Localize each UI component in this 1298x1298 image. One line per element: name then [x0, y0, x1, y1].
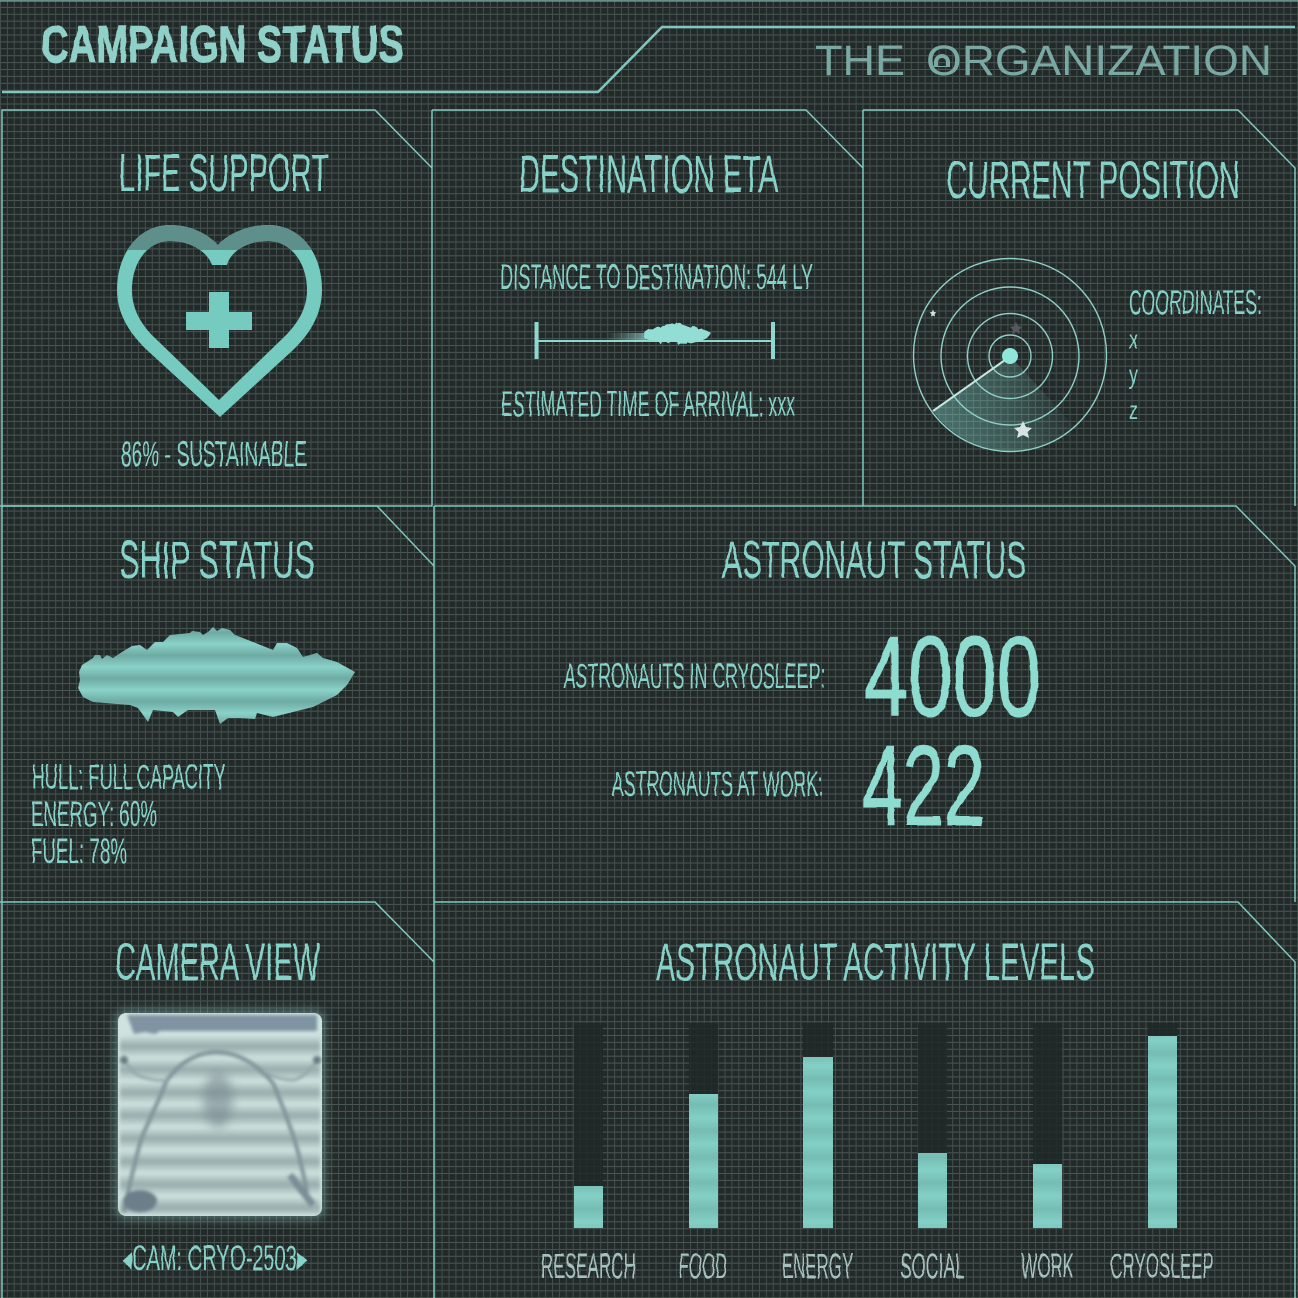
logo: the organization: THE — [815, 37, 905, 85]
bar chart — [574, 1023, 1177, 1228]
ship stats: FUEL: 78% — [31, 832, 127, 871]
panel: camera view — [0, 902, 434, 1298]
bar labels: SOCIAL — [900, 1247, 965, 1286]
coordinates — [1129, 284, 1262, 425]
bar labels — [541, 1247, 1214, 1286]
title: CAMPAIGN STATUS — [41, 16, 404, 74]
ship stats — [31, 758, 226, 871]
stat: cryosleep value: 4000 — [864, 614, 1041, 741]
panel: destination eta — [432, 110, 863, 506]
panel: life support — [2, 110, 432, 506]
camera label: ◂CAM: CRYO-2503▸ — [122, 1239, 307, 1278]
coordinates: z — [1129, 395, 1138, 425]
bar labels: RESEARCH — [541, 1247, 636, 1286]
heading: destination eta: DESTINATION ETA — [519, 145, 778, 204]
panel: astronaut status — [434, 506, 1295, 902]
bar labels: FOOD — [679, 1247, 727, 1286]
heading: camera view: CAMERA VIEW — [115, 933, 320, 992]
camera image — [115, 1010, 325, 1219]
panel: ship status — [0, 506, 434, 902]
radar — [914, 258, 1106, 452]
arrival text: ESTIMATED TIME OF ARRIVAL: xxx — [501, 385, 795, 424]
stat: work label: ASTRONAUTS AT WORK: — [612, 765, 823, 804]
coordinates: y — [1129, 359, 1138, 389]
stat: work value: 422 — [862, 723, 985, 850]
logo: the organization: ORGANIZATION — [926, 37, 1272, 85]
bar labels: WORK — [1021, 1247, 1074, 1286]
progress track with ship — [534, 322, 775, 359]
distance text: DISTANCE TO DESTINATION: 544 LY — [500, 258, 813, 297]
status text: 86% - SUSTAINABLE — [121, 435, 307, 474]
heading: astronaut status: ASTRONAUT STATUS — [722, 531, 1026, 590]
icon: ship silhouette — [78, 627, 355, 724]
panel: astronaut activity levels — [434, 902, 1295, 1298]
icon: heart with cross — [117, 225, 322, 417]
coordinates: x — [1129, 324, 1138, 354]
panel: current position — [863, 110, 1295, 506]
ship stats: HULL: FULL CAPACITY — [32, 758, 226, 797]
bar labels: ENERGY — [782, 1247, 853, 1286]
ship stats: ENERGY: 60% — [31, 795, 157, 834]
heading: life support: LIFE SUPPORT — [119, 144, 329, 203]
header frame — [0, 1, 1298, 92]
heading: ship status: SHIP STATUS — [119, 531, 315, 590]
stat: cryosleep label: ASTRONAUTS IN CRYOSLEEP: — [564, 657, 825, 696]
